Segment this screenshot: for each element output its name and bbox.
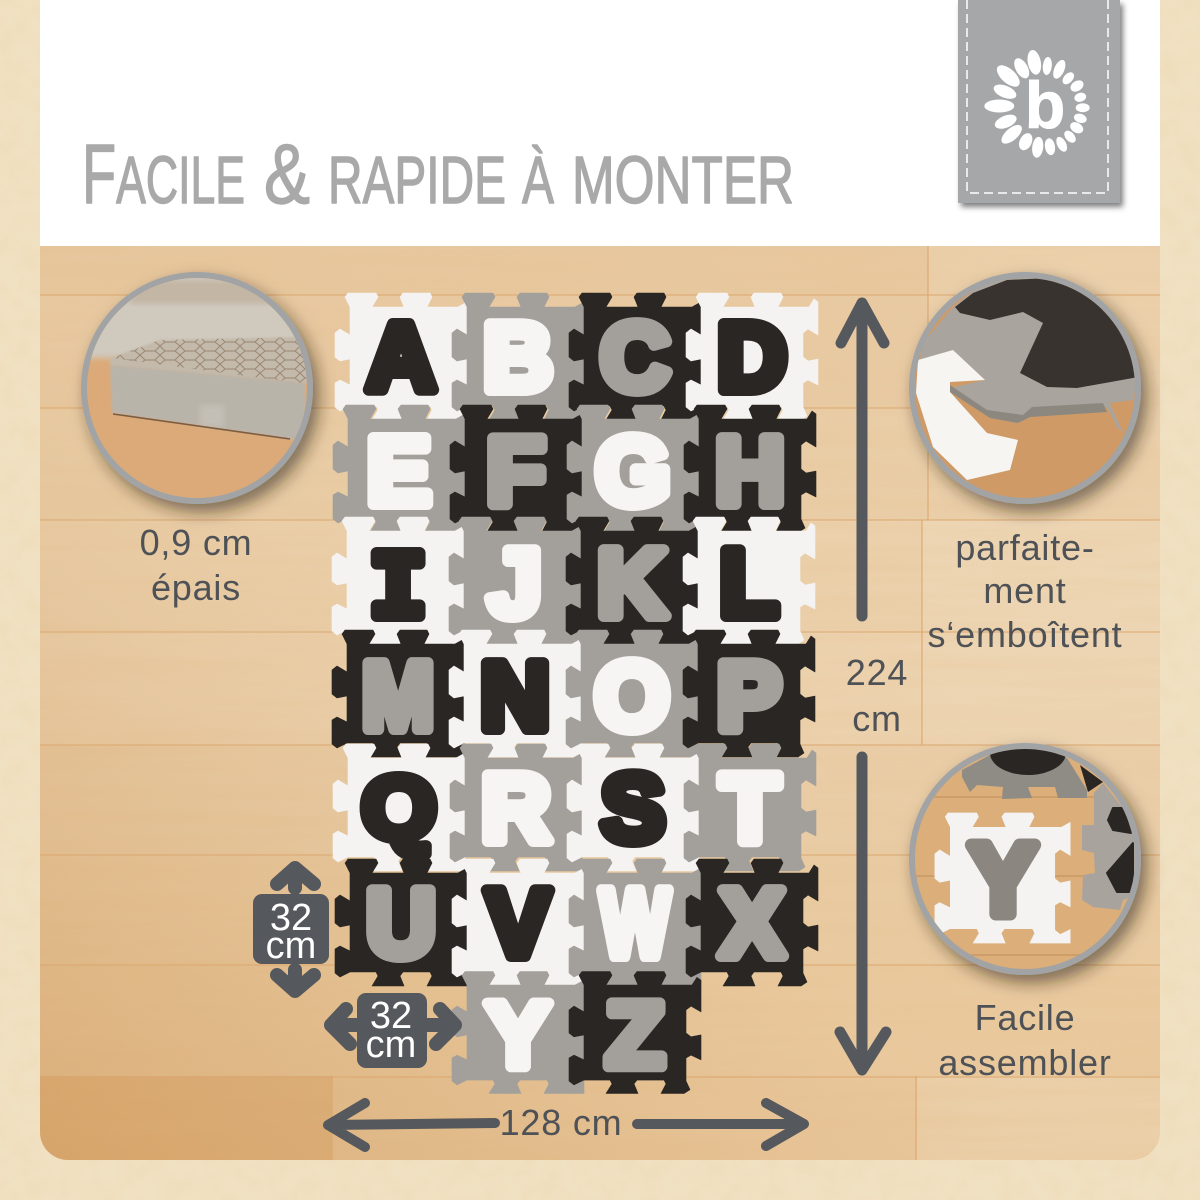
- caption: interlock: parfaite-: [955, 527, 1095, 568]
- tile C: [569, 293, 701, 420]
- brand tag: [958, 0, 1120, 203]
- tile U: [335, 859, 467, 986]
- caption: interlock: s‘emboîtent: [928, 614, 1122, 655]
- puzzle mat: [332, 293, 818, 1093]
- tile J: [449, 517, 581, 644]
- caption: easy assembly: Facile: [975, 997, 1075, 1038]
- tile X: [686, 859, 818, 986]
- arrow: width right: [637, 1103, 804, 1146]
- tile O: [566, 630, 698, 757]
- title: &: [264, 127, 310, 221]
- badge: tile height 32 cm: cm: [266, 925, 316, 967]
- tile I: I: [369, 536, 427, 645]
- tile K: [566, 517, 698, 644]
- badge: tile height 32 cm: [253, 868, 329, 991]
- brand tag: b: [1025, 68, 1065, 142]
- tile N: N: [480, 643, 550, 750]
- tile O: O: [595, 643, 669, 750]
- tile H: [684, 405, 816, 532]
- tile I: [332, 517, 464, 645]
- caption: interlock: [928, 527, 1122, 655]
- caption: thickness: [140, 522, 252, 608]
- label: 224 cm: [846, 652, 908, 739]
- tile X: X: [720, 870, 784, 977]
- tile G: [567, 405, 699, 532]
- tile F: [450, 405, 582, 532]
- arrow: width left: [328, 1103, 495, 1147]
- tile V: [452, 859, 584, 986]
- caption: easy assembly: [938, 997, 1112, 1083]
- title: à: [522, 118, 554, 224]
- tile W: W: [600, 870, 670, 977]
- tile B: B: [483, 304, 553, 411]
- badge: tile width 32 cm: [331, 993, 455, 1068]
- tile Y: Y: [486, 983, 550, 1086]
- tile A: [335, 293, 467, 420]
- tile S: [567, 744, 699, 871]
- tile M: [332, 630, 464, 757]
- label: 224 cm: 224: [846, 652, 908, 693]
- caption: easy assembly: assembler: [938, 1042, 1112, 1083]
- tile P: P: [717, 643, 781, 750]
- circle: assembling tile photo: Y: [970, 824, 1036, 936]
- label: 128 cm: 128 cm: [500, 1102, 622, 1143]
- tile G: G: [596, 418, 670, 525]
- tile E: [333, 405, 465, 532]
- tile E: E: [367, 418, 431, 525]
- tile Q: [333, 744, 465, 871]
- circle: assembling tile photo: [908, 731, 1143, 980]
- tile D: [686, 293, 818, 420]
- tile N: [449, 630, 581, 757]
- title: [82, 118, 794, 224]
- title: rapide: [328, 118, 506, 224]
- tile M: M: [362, 643, 434, 750]
- arrow: height lower: [840, 757, 886, 1070]
- tile S: S: [601, 755, 665, 862]
- tile B: [452, 293, 584, 420]
- tile Q: Q: [362, 759, 436, 857]
- title: monter: [572, 118, 794, 224]
- tile D: D: [717, 304, 787, 411]
- tile A: A: [366, 304, 436, 411]
- tile T: [684, 744, 816, 871]
- tile L: [683, 517, 815, 644]
- tile Z: Z: [606, 983, 664, 1086]
- circle: mat thickness photo: [80, 270, 315, 510]
- tile R: [450, 744, 582, 871]
- caption: interlock: ment: [983, 570, 1067, 611]
- badge: tile width 32 cm: 32: [370, 995, 412, 1037]
- tile H: H: [715, 418, 785, 525]
- tile L: L: [720, 530, 778, 637]
- tile W: [569, 859, 701, 986]
- tile T: T: [721, 755, 779, 862]
- badge: tile height 32 cm: 32: [270, 897, 312, 939]
- tile P: [683, 630, 815, 757]
- arrow: height upper: [841, 303, 884, 616]
- tile Y: [452, 972, 584, 1093]
- white header panel: [40, 0, 1160, 246]
- title: Facile: [82, 118, 245, 224]
- tile C: C: [600, 304, 670, 411]
- wood floor panel: [40, 246, 1160, 1160]
- caption: thickness: épais: [151, 567, 241, 608]
- tile V: V: [486, 870, 550, 977]
- tile Z: [569, 972, 701, 1093]
- badge: tile width 32 cm: cm: [366, 1024, 416, 1066]
- tile J: J: [488, 530, 542, 637]
- tile F: F: [487, 418, 545, 525]
- tile U: U: [366, 870, 436, 977]
- circle: interlocking edges photo: [908, 270, 1150, 510]
- tile R: R: [481, 755, 551, 862]
- caption: thickness: 0,9 cm: [140, 522, 252, 563]
- label: 224 cm: cm: [852, 698, 902, 739]
- tile K: K: [597, 530, 667, 637]
